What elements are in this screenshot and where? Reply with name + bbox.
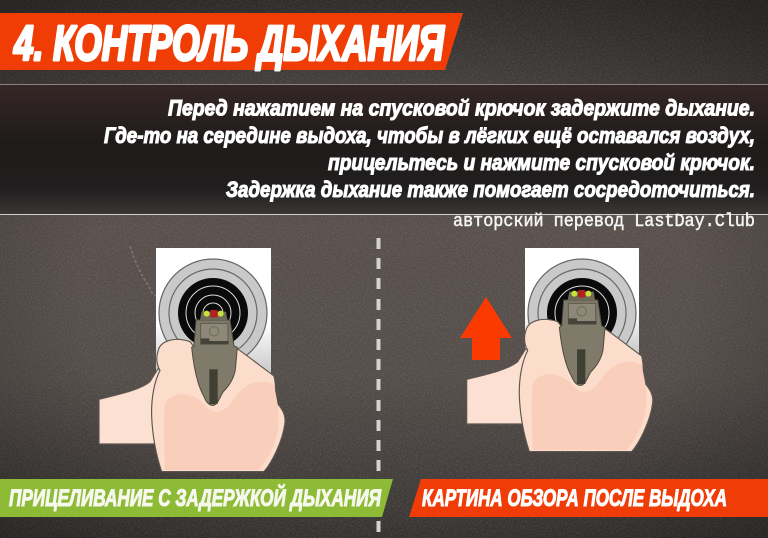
left target bbox=[156, 248, 271, 373]
title banner bbox=[0, 13, 463, 71]
title: 4. КОНТРОЛЬ ДЫХАНИЯ bbox=[13, 17, 445, 71]
body text bbox=[104, 96, 755, 202]
icon: red up arrow bbox=[460, 297, 512, 360]
left caption banner: ПРИЦЕЛИВАНИЕ С ЗАДЕРЖКОЙ ДЫХАНИЯ bbox=[9, 483, 381, 512]
dashed divider bbox=[376, 238, 380, 532]
right target bbox=[525, 248, 639, 367]
left caption banner bbox=[0, 479, 393, 517]
translator credit: авторский перевод LastDay.Club bbox=[453, 212, 755, 232]
right hand with pistol, sights raised after exhale bbox=[467, 290, 653, 452]
text band bbox=[0, 84, 768, 215]
left hand with pistol, sights on the bullseye bbox=[99, 310, 285, 472]
right caption banner bbox=[409, 479, 768, 517]
